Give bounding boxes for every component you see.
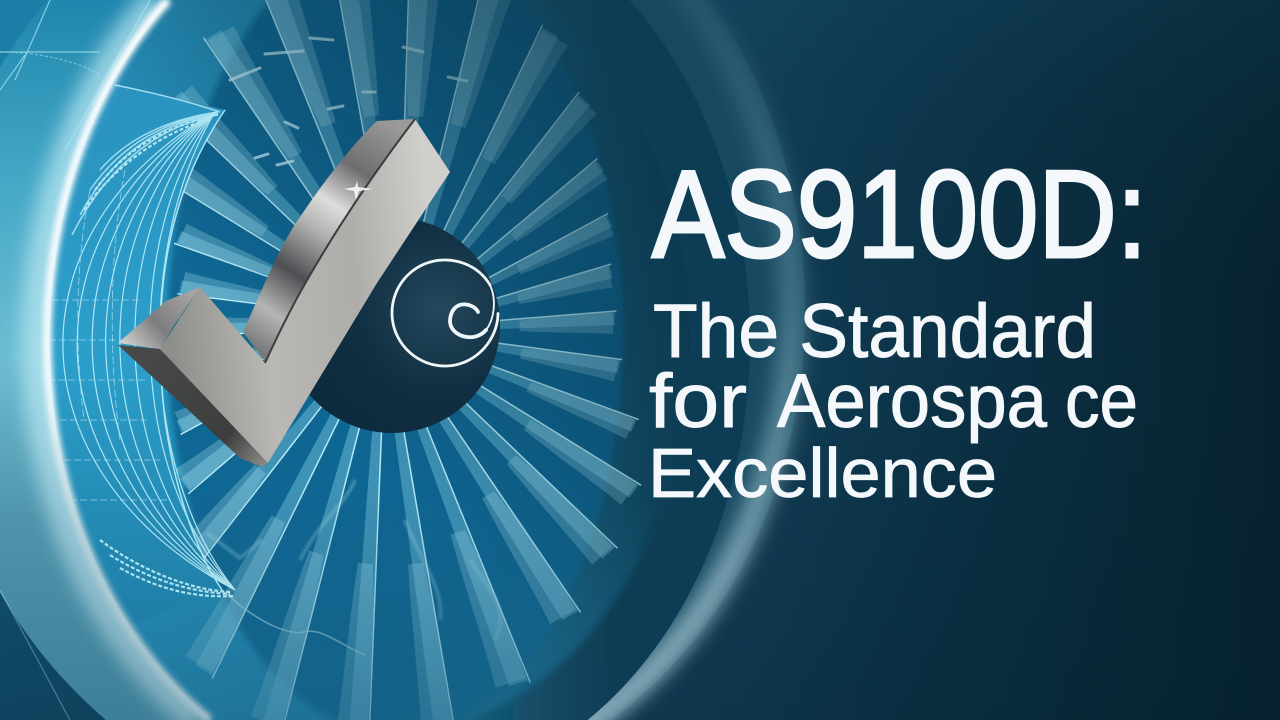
engine nacelle ring — [0, 0, 870, 720]
lower muted tint — [131, 503, 618, 720]
subtitle line 2 — [649, 359, 1138, 444]
spiral emblem — [392, 260, 498, 366]
subtitle line 3: Excellence — [648, 434, 997, 512]
ring soft glow — [38, 0, 201, 720]
check short arm top — [118, 287, 200, 349]
title: AS9100D: — [652, 146, 1147, 284]
fan blades — [153, 0, 641, 720]
subtitle line 2: ce — [1065, 359, 1138, 444]
subtitle line 1: The Standard — [653, 289, 1096, 374]
silver check mark — [118, 119, 450, 467]
blade cross ticks — [230, 38, 467, 165]
outer ring blueprint lines — [0, 0, 150, 720]
check long arm inner face — [243, 119, 414, 363]
lower blade wave lines — [207, 480, 500, 655]
darkening toward the right — [116, 0, 688, 612]
subtitle line 2: Aerospa — [777, 359, 1048, 444]
check front face — [160, 119, 450, 463]
check side face — [118, 345, 268, 467]
dark blade bed — [167, 0, 623, 720]
engine hub — [284, 217, 500, 433]
bright inner edge of the ring — [47, 0, 210, 720]
blueprint wire band — [50, 84, 236, 608]
subtitle line 2: for — [649, 359, 747, 444]
engine fan disc — [50, 0, 750, 720]
